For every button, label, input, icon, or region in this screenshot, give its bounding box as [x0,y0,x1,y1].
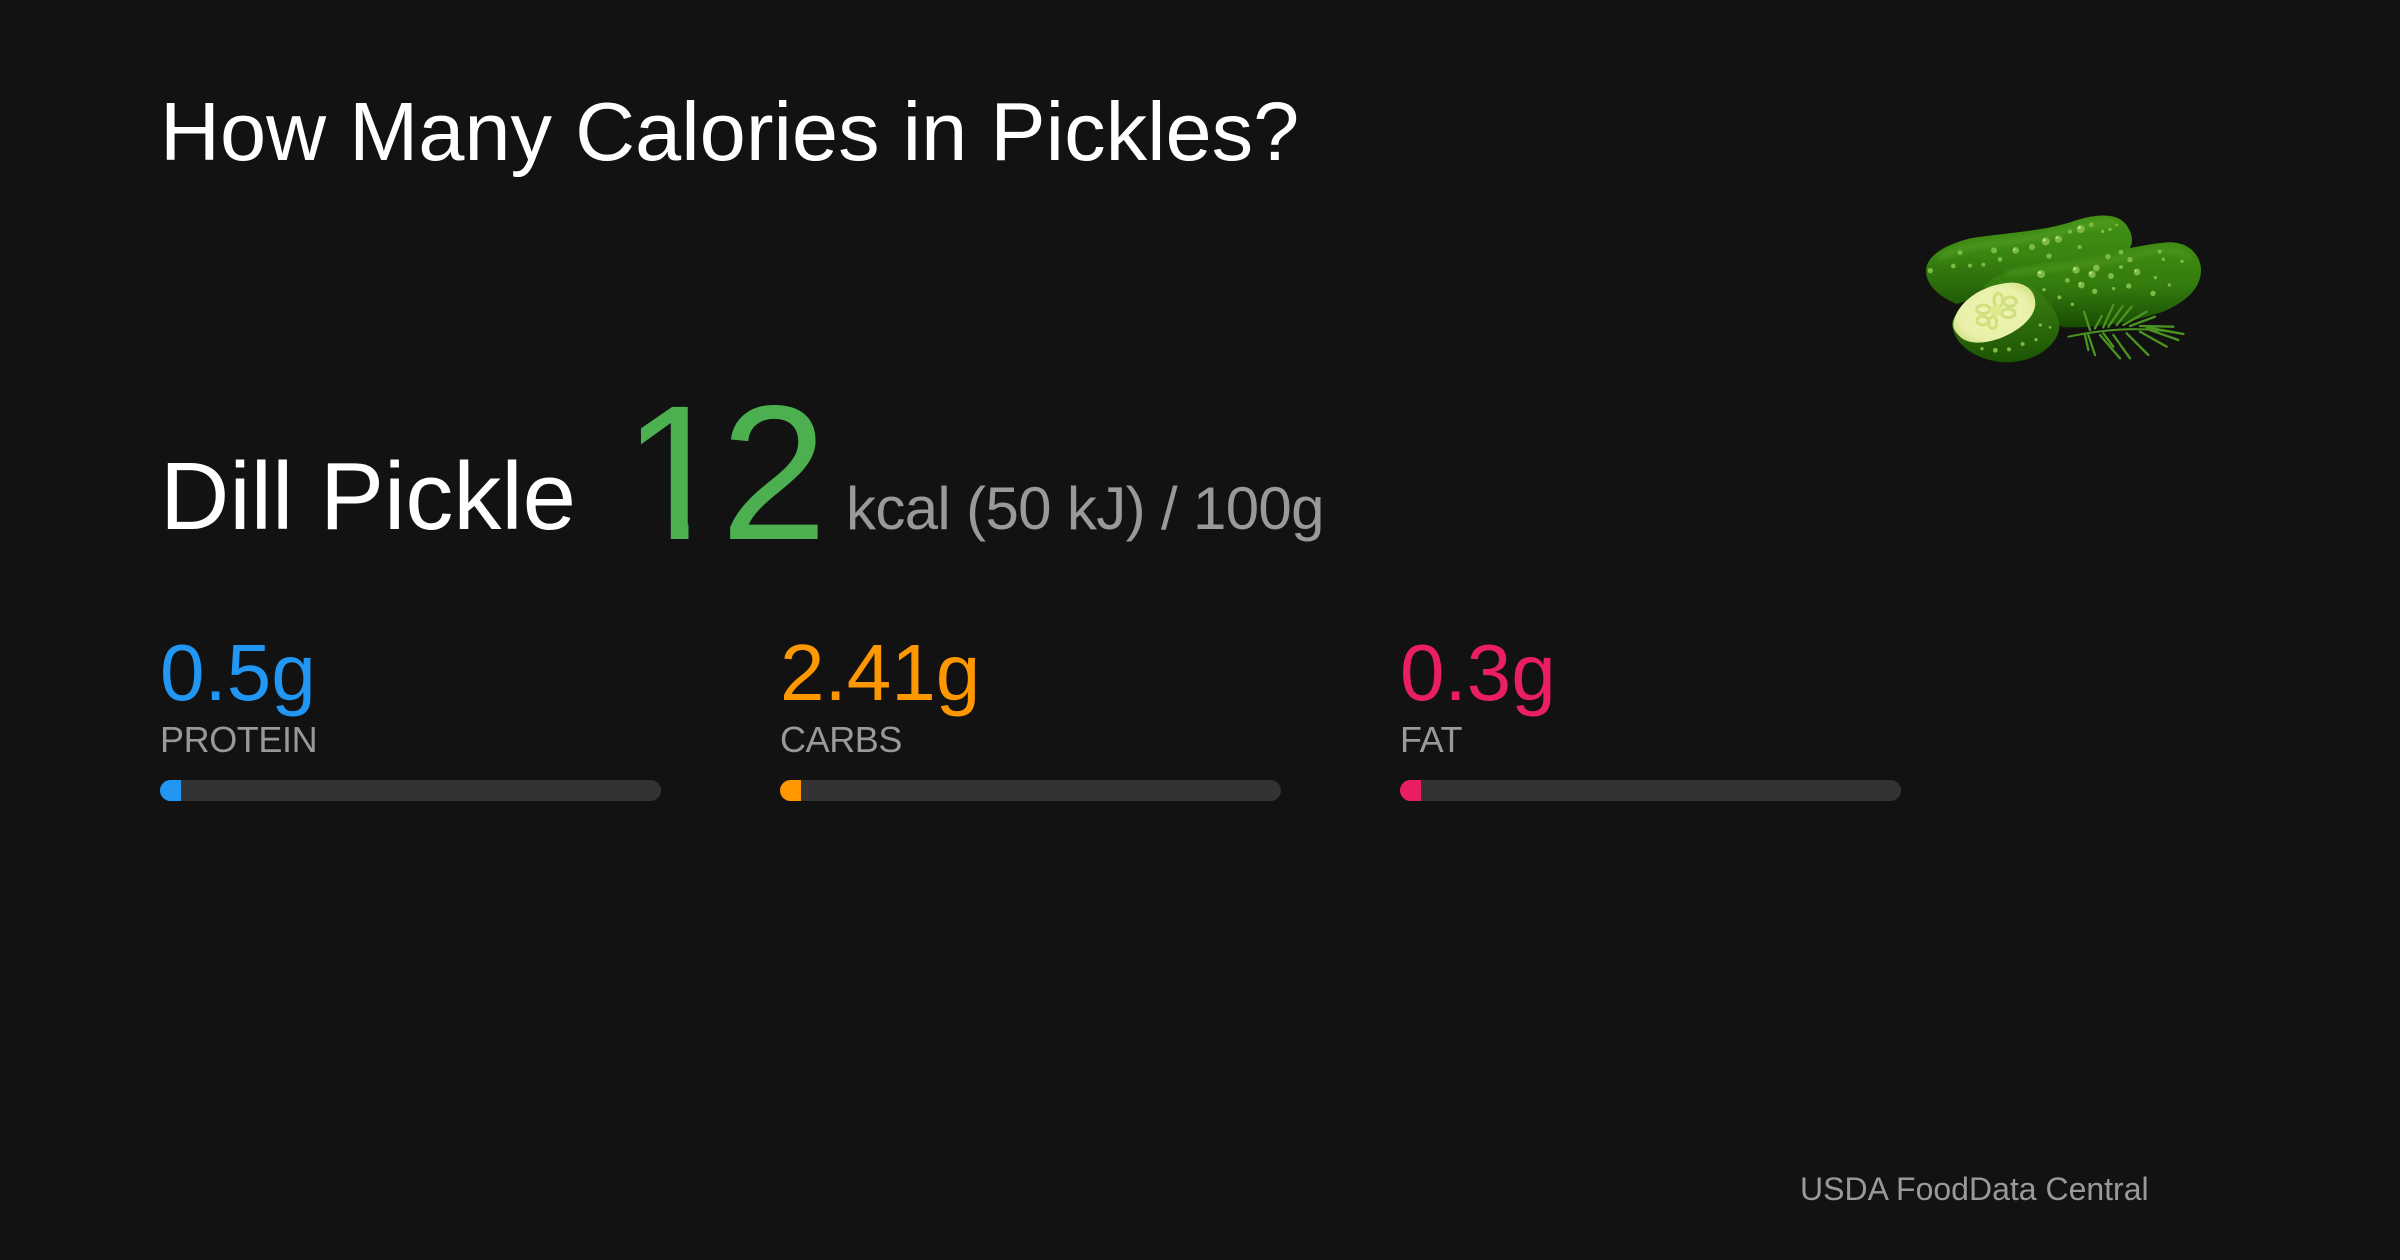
source: USDA FoodData Central [1800,1170,2149,1206]
protein label: PROTEIN [160,718,317,760]
fat value: 0.3g [1400,628,1556,717]
carbs value: 2.41g [780,628,980,717]
calorie value: 2 [720,365,827,580]
fat label: FAT [1400,718,1462,760]
carbs bar [780,780,1281,801]
protein bar [160,780,661,801]
calorie value [640,365,827,580]
macro: carbs [780,628,1281,801]
title: How Many Calories in Pickles? [160,85,1299,178]
macro: fat [1400,628,1901,801]
fat bar [1400,780,1901,801]
macro: protein [160,628,661,801]
carbs label: CARBS [780,718,902,760]
food name: Dill Pickle [160,443,576,550]
protein value: 0.5g [160,628,316,717]
calorie value: 1 [622,365,729,580]
icon: pickles with dill [1926,216,2201,362]
calorie unit: kcal (50 kJ) / 100g [846,475,1324,542]
